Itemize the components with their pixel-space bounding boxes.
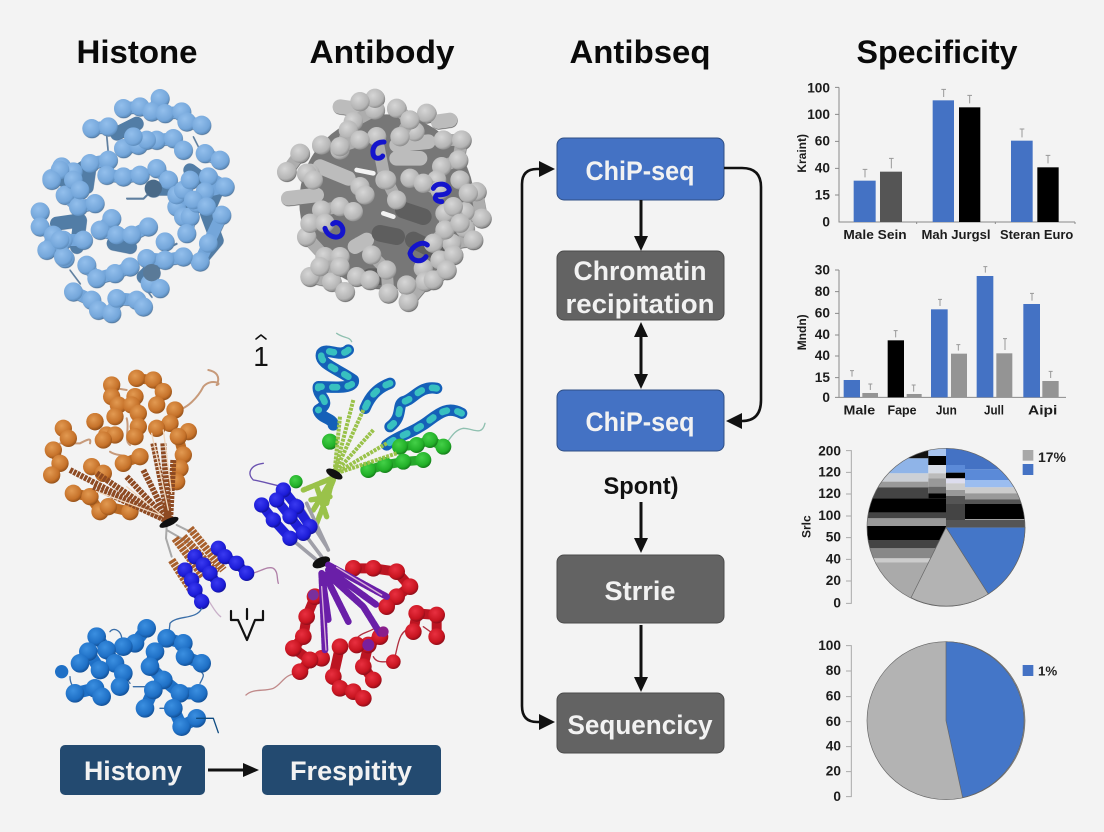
icon: V bracket symbol bbox=[231, 609, 263, 640]
y axis ticks: 50 bbox=[826, 530, 841, 545]
arrow: Strrie to Sequencicy bbox=[634, 625, 648, 692]
box: Sequencicy bbox=[557, 693, 724, 753]
y axis ticks: 100 bbox=[807, 80, 830, 95]
y axis ticks: 120 bbox=[818, 486, 841, 501]
arrow: double headed bbox=[634, 322, 648, 389]
y axis ticks: 80 bbox=[826, 663, 841, 678]
y axis ticks: 100 bbox=[818, 508, 841, 523]
bars bbox=[844, 276, 1059, 397]
icon: black linker knot bbox=[158, 515, 180, 530]
icon: black linker knot lower bbox=[311, 554, 332, 571]
y axis ticks bbox=[818, 638, 841, 804]
y axis label: Srlc bbox=[800, 515, 814, 538]
box: Histony bbox=[60, 745, 205, 795]
x labels: Mah Jurgsl bbox=[921, 228, 990, 242]
legend: 17% bbox=[1038, 449, 1067, 465]
arrow: left feedback loop bbox=[522, 161, 555, 730]
legend: 1% bbox=[1038, 664, 1057, 679]
y axis ticks: 40 bbox=[826, 551, 841, 566]
icon: antibody protein structure bbox=[287, 98, 482, 302]
y axis ticks: 100 bbox=[818, 638, 841, 653]
box: Frespitity: Frespitity bbox=[290, 756, 412, 786]
box: ChiP-seq middle bbox=[557, 390, 724, 451]
y axis ticks: 30 bbox=[815, 262, 830, 277]
y axis ticks: 40 bbox=[815, 327, 830, 342]
y axis ticks: 80 bbox=[815, 284, 830, 299]
y axis ticks: 120 bbox=[818, 465, 841, 480]
x labels: Jun bbox=[936, 403, 957, 417]
box: Chromatin recipitation: recipitation bbox=[566, 289, 714, 319]
y axis ticks: 0 bbox=[833, 595, 841, 610]
box: Frespitity bbox=[262, 745, 441, 795]
y axis ticks bbox=[815, 262, 830, 405]
y axis ticks: 20 bbox=[826, 764, 841, 779]
chart: top bar chart bbox=[795, 80, 1075, 242]
y axis label: Mndn) bbox=[795, 314, 809, 350]
title: Antibody: Antibody bbox=[310, 34, 455, 70]
title: Histone: Histone bbox=[76, 34, 198, 70]
arrow: right feedback loop bbox=[724, 168, 761, 429]
x labels: Male bbox=[843, 403, 875, 417]
box: Sequencicy: Sequencicy bbox=[568, 710, 712, 740]
pie slices bbox=[867, 642, 1025, 800]
legend bbox=[1023, 449, 1067, 475]
box: Strrie bbox=[557, 555, 724, 623]
legend bbox=[1023, 664, 1057, 679]
x labels bbox=[843, 228, 1074, 242]
icon: blue binding loops bbox=[325, 142, 449, 261]
x labels: Steran Euro bbox=[1000, 228, 1074, 242]
y axis ticks: 15 bbox=[815, 370, 830, 385]
y axis ticks: 100 bbox=[807, 107, 830, 122]
y axis ticks: 0 bbox=[833, 789, 841, 804]
chart: striped pie chart bbox=[800, 443, 1067, 610]
y axis ticks: 20 bbox=[826, 573, 841, 588]
box: Histony: Histony bbox=[84, 756, 182, 786]
icon: black linker knot upper bbox=[325, 466, 344, 482]
label: Spont): Spont) bbox=[604, 473, 678, 500]
y axis ticks: 60 bbox=[826, 714, 841, 729]
y axis ticks: 40 bbox=[815, 348, 830, 363]
icon: histone protein structure bbox=[40, 98, 225, 313]
arrow: Spont to Strrie bbox=[634, 502, 648, 553]
y axis ticks bbox=[807, 80, 830, 229]
title: Specificity: Specificity bbox=[856, 34, 1018, 70]
y axis ticks: 60 bbox=[826, 689, 841, 704]
y axis ticks bbox=[818, 443, 841, 610]
y axis ticks: 0 bbox=[822, 214, 830, 229]
y axis ticks: 40 bbox=[815, 161, 830, 176]
arrow: Histony to Frespitity bbox=[208, 763, 259, 777]
y axis label: Kraint) bbox=[795, 134, 809, 173]
pie stripes bbox=[867, 448, 1025, 598]
y axis ticks: 60 bbox=[815, 134, 830, 149]
y axis ticks: 60 bbox=[815, 306, 830, 321]
pie slices bbox=[867, 448, 1025, 606]
box: ChiP-seq middle: ChiP-seq bbox=[586, 407, 694, 437]
chart: lower bar chart bbox=[795, 262, 1066, 417]
box: ChiP-seq top: ChiP-seq bbox=[586, 156, 694, 186]
box: Strrie: Strrie bbox=[604, 576, 676, 606]
chart: plain pie chart bbox=[818, 638, 1057, 804]
y axis ticks: 0 bbox=[822, 390, 830, 405]
y axis ticks: 200 bbox=[818, 443, 841, 458]
x labels: Jull bbox=[984, 403, 1004, 417]
y axis ticks: 40 bbox=[826, 739, 841, 754]
icon: multicolour molecule bbox=[246, 333, 485, 698]
x labels: Fape bbox=[887, 403, 916, 417]
x labels: Male Sein bbox=[843, 228, 907, 242]
y axis ticks: 15 bbox=[815, 187, 830, 202]
arrow: ChiP-seq to Chromatin bbox=[634, 200, 648, 251]
x labels bbox=[843, 403, 1057, 417]
title: Antibseq: Antibseq bbox=[570, 34, 710, 70]
icon: orange and blue molecule bbox=[52, 370, 278, 733]
box: Chromatin recipitation bbox=[557, 251, 724, 320]
box: Chromatin recipitation: Chromatin bbox=[574, 256, 706, 286]
icon: caret one symbol: 1 bbox=[253, 341, 269, 372]
x labels: Aipi bbox=[1028, 403, 1057, 417]
bars bbox=[854, 100, 1059, 222]
box: ChiP-seq top bbox=[557, 138, 724, 200]
